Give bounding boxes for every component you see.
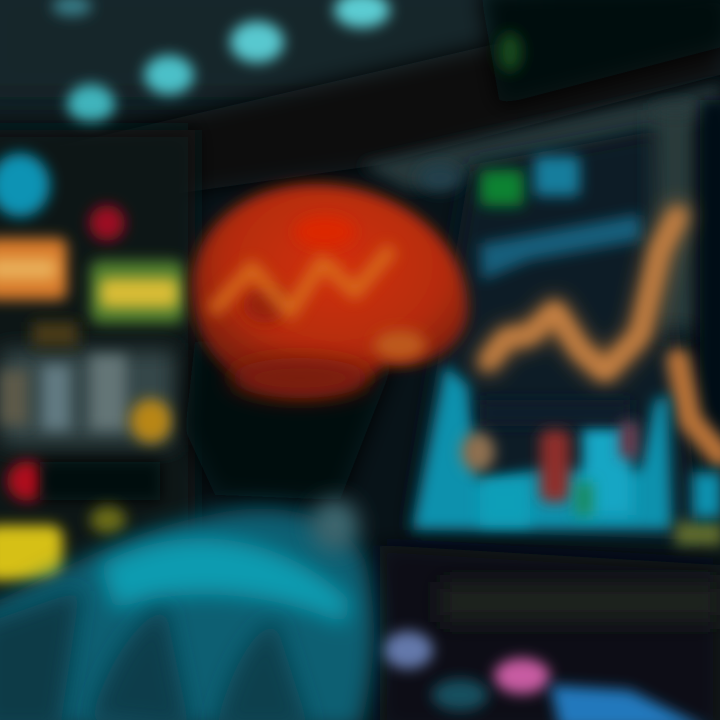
line chart [488,215,678,372]
panel: left wall of screens [0,130,195,610]
icon: red light lower [7,461,47,501]
icon: green and blue tiles [480,170,524,206]
panel: desk and keyboard [380,545,720,720]
orange bar [0,238,67,300]
panel: right market screen [410,100,720,546]
zigzag highlight [212,248,392,312]
ceiling with lights [0,0,720,210]
icon: ceiling lights [67,84,115,124]
icon: glowing red brain [192,184,468,398]
muted data columns [0,350,175,445]
yellow bar lower [0,525,63,581]
candlesticks [461,432,495,472]
yellow bar [90,260,184,324]
teal band [480,214,642,280]
bar chart glow [412,365,672,530]
figure: trader's head and shoulders [0,340,395,720]
icon: colored keys [383,631,433,669]
icon: amber light [130,399,172,443]
icon: red light [89,205,125,241]
icon: cyan shape [0,153,50,217]
shoulders with cyan shirt [0,509,374,720]
